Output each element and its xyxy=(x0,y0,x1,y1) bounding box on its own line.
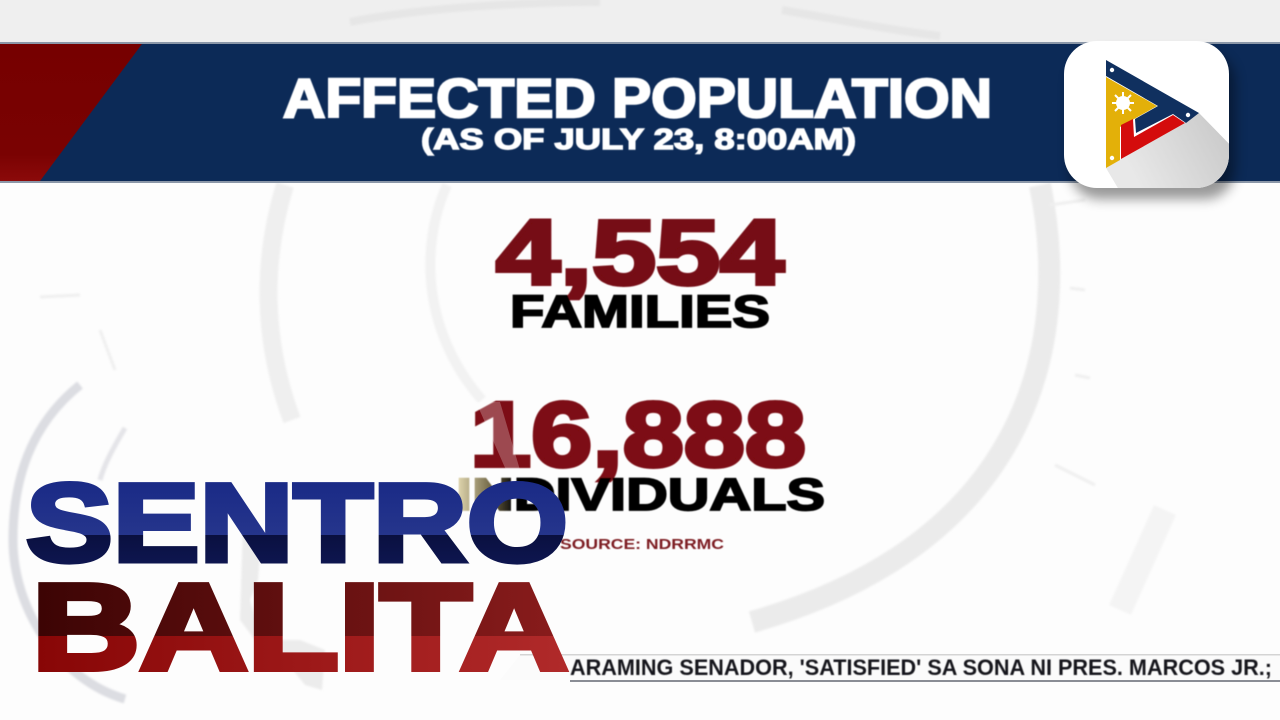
families number: 4,554 xyxy=(496,202,784,304)
logo tile xyxy=(1064,41,1240,200)
title xyxy=(283,67,992,156)
families label: FAMILIES xyxy=(510,286,770,337)
families figure xyxy=(496,202,784,337)
show logo xyxy=(26,481,570,690)
BALITA wordmark lower: BALITA xyxy=(32,559,568,695)
individuals number: 16,888 xyxy=(470,384,806,486)
header band xyxy=(0,42,1280,183)
SENTRO wordmark: SENTRO xyxy=(26,461,568,585)
red corner xyxy=(0,44,142,181)
ticker xyxy=(500,654,1280,682)
date subheading: (AS OF JULY 23, 8:00AM) xyxy=(421,124,856,156)
faint streak over number xyxy=(476,402,520,470)
individuals label: INDIVIDUALS xyxy=(456,469,825,520)
individuals figure xyxy=(456,384,825,553)
top strip xyxy=(0,0,1280,43)
BALITA wordmark upper: BALITA xyxy=(32,559,568,695)
logo mark xyxy=(1106,60,1229,188)
map watermark xyxy=(240,523,325,690)
source: SOURCE: NDRRMC xyxy=(560,537,725,553)
heading: AFFECTED POPULATION xyxy=(283,67,992,129)
ticker text: ARAMING SENADOR, 'SATISFIED' SA SONA NI PRES. MARCOS JR.; xyxy=(570,655,1272,680)
